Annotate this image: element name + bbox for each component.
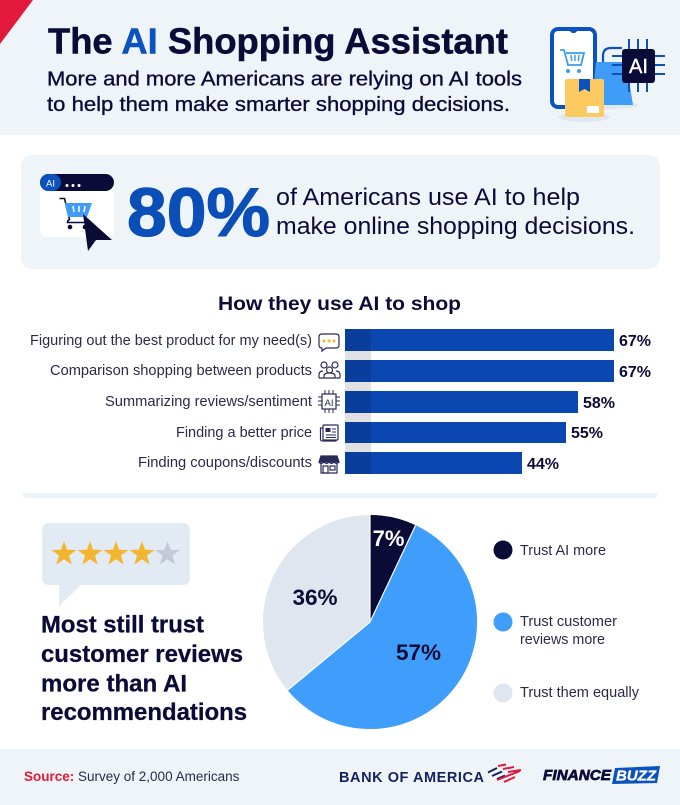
chart heading: How they use AI to shop [218, 293, 461, 315]
bar: better price 55% [176, 422, 603, 443]
icon: AI browser with shopping cart [40, 174, 114, 251]
logo: FinanceBuzz: FINANCE [543, 767, 612, 784]
icon: phone, bag, box and AI chip: AI [629, 56, 648, 78]
background header band [0, 0, 680, 135]
icon: storefront [319, 456, 339, 473]
text: trust reviews headline: customer reviews [41, 641, 243, 668]
big number 80%: 80% [127, 174, 270, 251]
logo: Bank of America [339, 764, 521, 786]
legend: trust AI more: Trust AI more [520, 543, 606, 559]
legend: trust them equally [494, 684, 640, 702]
footer band [0, 749, 680, 805]
stat description [276, 184, 635, 240]
text: trust reviews headline [41, 612, 247, 726]
pie chart: trust [263, 515, 477, 729]
bar: summarizing reviews 58% [105, 391, 615, 413]
panel: 80% stat [21, 155, 660, 269]
bar: better price 55%: Finding a better price [176, 425, 312, 441]
icon: review bubble with stars [42, 523, 190, 606]
pie chart: trust: 57% [396, 640, 441, 665]
subtitle: to help them make smarter shopping decisions. [47, 93, 510, 116]
legend: trust customer reviews more [494, 612, 617, 648]
legend [494, 540, 640, 702]
source: Source: Survey of 2,000 Americans [24, 769, 240, 784]
stat description: make online shopping decisions. [276, 213, 635, 240]
bar: best product 67%: Figuring out the best product for my need(s) [30, 333, 312, 349]
bar: best product 67%: 67% [619, 333, 651, 350]
bar: summarizing reviews 58%: Summarizing reviews/sentiment [105, 394, 312, 410]
bar: coupons 44%: Finding coupons/discounts [138, 455, 312, 471]
stat description: of Americans use AI to help [276, 184, 580, 211]
icon: newspaper [320, 425, 338, 441]
bar chart: how they use AI [30, 329, 651, 474]
bar: better price 55%: 55% [571, 425, 603, 442]
bar: summarizing reviews 58%: 58% [583, 395, 615, 412]
icon: phone, bag, box and AI chip [552, 28, 665, 122]
legend: trust them equally: Trust them equally [520, 685, 640, 701]
bar: comparison shopping 67%: Comparison shopping between products [50, 363, 312, 379]
logo: FinanceBuzz: BUZZ [616, 768, 657, 784]
icon: AI chip: AI [325, 398, 333, 409]
text: trust reviews headline: recommendations [41, 699, 247, 726]
icon: AI browser with shopping cart: AI [46, 178, 55, 190]
logo: FinanceBuzz [543, 766, 660, 784]
subtitle: More and more Americans are relying on AI tools [47, 68, 522, 90]
pie chart: trust: 7% [373, 526, 404, 551]
icon: group of people [319, 362, 340, 378]
logo: Bank of America: BANK OF AMERICA [339, 770, 485, 786]
bar: best product 67% [30, 329, 651, 351]
bar: coupons 44%: 44% [527, 456, 559, 473]
pie chart: trust: 36% [292, 585, 338, 610]
icon: AI chip [318, 390, 340, 413]
legend: trust AI more [494, 540, 606, 560]
bar: comparison shopping 67% [50, 360, 651, 382]
text: trust reviews headline: more than AI [41, 670, 187, 698]
corner accent [0, 0, 33, 44]
icon: speech bubble with stars [319, 334, 339, 351]
legend: trust customer reviews more: Trust customer [520, 614, 617, 630]
subtitle [47, 68, 522, 116]
bar: coupons 44% [138, 452, 559, 474]
bar: comparison shopping 67%: 67% [619, 364, 651, 381]
text: trust reviews headline: Most still trust [41, 612, 204, 638]
divider [23, 493, 657, 498]
legend: trust customer reviews more: reviews more [520, 632, 605, 648]
title: The AI Shopping Assistant [48, 20, 508, 62]
